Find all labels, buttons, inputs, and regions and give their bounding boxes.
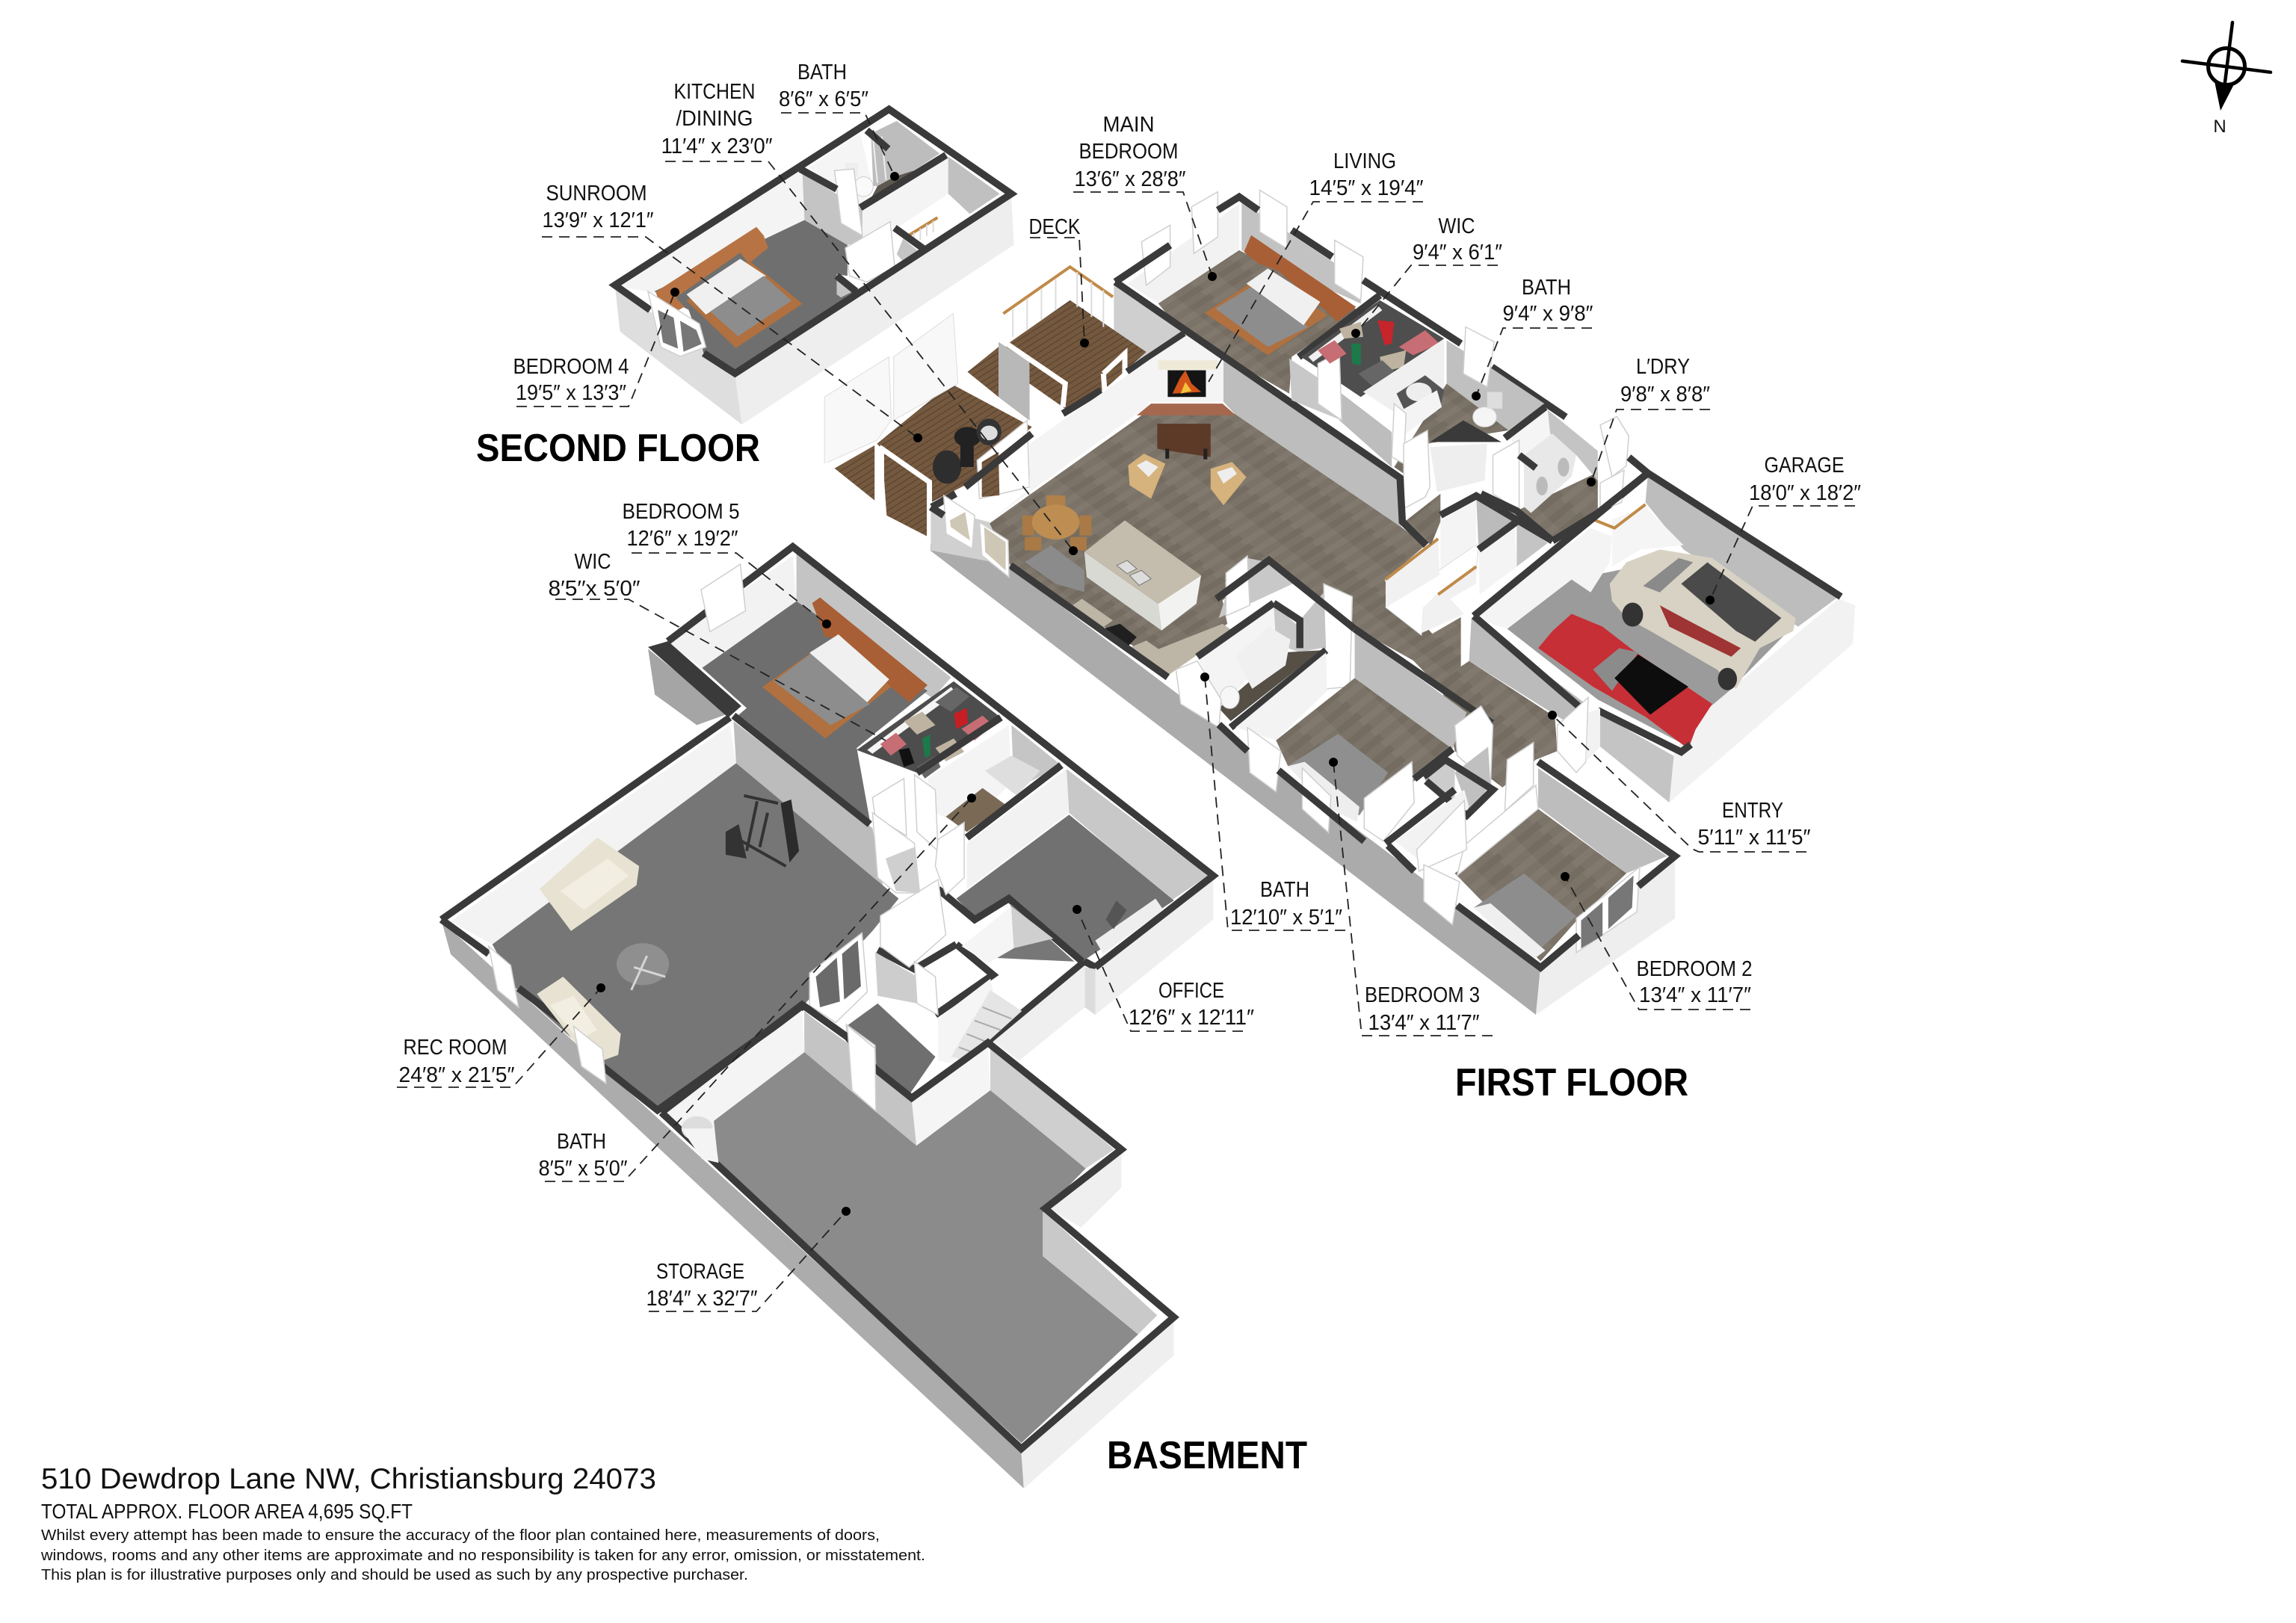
- label: second floor bath: BATH: [797, 61, 847, 84]
- label: sunroom: 13′9″ x 12′1″: [543, 208, 653, 232]
- text: disclaimer: windows, rooms and any other items are approximate and no responsibility is taken for any error, omission, or misstatement.: [40, 1547, 925, 1564]
- label: first floor hall bath: 12′10″ x 5′1″: [1230, 906, 1342, 930]
- label: first floor wic: [1351, 214, 1502, 338]
- carpet floor: [655, 220, 856, 374]
- label: main bedroom: BEDROOM: [1079, 140, 1178, 164]
- icon: armchair left: [1128, 454, 1165, 498]
- text: disclaimer: [40, 1527, 925, 1583]
- heading: first floor: FIRST FLOOR: [1455, 1061, 1688, 1104]
- icon: sofa: [540, 838, 639, 931]
- panel: hall closets: [1424, 706, 1534, 815]
- label: first floor main bath: [1472, 276, 1593, 401]
- door: entry: [1558, 697, 1588, 773]
- panel: bedroom 2: [1386, 761, 1675, 968]
- icon: bed basement: [762, 597, 928, 738]
- label: basement bath: [538, 794, 976, 1181]
- label: bedroom 5: 12′6″ x 19′2″: [626, 527, 738, 551]
- panel: main bedroom: [1115, 190, 1566, 480]
- icon: north compass: N: [2213, 117, 2226, 137]
- label: rec room: 24′8″ x 21′5″: [399, 1063, 514, 1087]
- label: second floor bath: [779, 61, 899, 181]
- exterior wall: basement long side: [442, 921, 1024, 1488]
- label: bedroom 5: BEDROOM 5: [622, 500, 740, 524]
- label: office: 12′6″ x 12′11″: [1129, 1006, 1254, 1030]
- label: bedroom 4: 19′5″ x 13′3″: [516, 381, 626, 405]
- stairwell upstairs: [836, 157, 1000, 297]
- label: bedroom 3: BEDROOM 3: [1365, 983, 1480, 1007]
- living room wood floor: [989, 409, 1461, 710]
- label: garage: GARAGE: [1764, 454, 1845, 477]
- label: rec room: REC ROOM: [404, 1036, 507, 1060]
- label: first floor wic: 9′4″ x 6′1″: [1413, 241, 1502, 265]
- icon: sunroom window: [648, 291, 706, 356]
- text: total floor area: TOTAL APPROX. FLOOR AREA 4,695 SQ.FT: [41, 1500, 413, 1523]
- label: laundry: [1587, 355, 1710, 486]
- label: bedroom 2: BEDROOM 2: [1637, 957, 1752, 981]
- panel: stairs: [1386, 477, 1552, 635]
- panel: hallway floor: [1440, 661, 1558, 788]
- panel: closet main bedroom: [1289, 300, 1444, 467]
- label: entry: ENTRY: [1722, 799, 1783, 823]
- icon: armchair: [537, 977, 621, 1064]
- icon: bed upstairs: [655, 227, 803, 348]
- label: rec room: [397, 983, 605, 1087]
- label: living: [1209, 149, 1423, 382]
- label: living: 14′5″ x 19′4″: [1309, 176, 1423, 200]
- label: storage: STORAGE: [656, 1260, 744, 1284]
- icon: window bedroom 5: [701, 564, 746, 631]
- label: laundry: L′DRY: [1636, 355, 1690, 379]
- panel: bedroom 3: [1219, 629, 1492, 841]
- panel: first floor north half: [824, 190, 1566, 710]
- label: bedroom 5: [622, 500, 831, 628]
- label: garage: 18′0″ x 18′2″: [1749, 481, 1861, 505]
- heading: second floor: SECOND FLOOR: [476, 427, 760, 470]
- label: bedroom 3: 13′4″ x 11′7″: [1368, 1011, 1480, 1035]
- label: bedroom 4: [513, 288, 679, 406]
- doors upstairs: [835, 169, 895, 282]
- panel: storage room: [661, 1004, 1174, 1488]
- label: second floor bath: 8′6″ x 6′5″: [779, 87, 868, 111]
- label: main bedroom: [1073, 113, 1217, 281]
- panel: second floor plan: [615, 109, 1014, 424]
- doors: french doors: [809, 933, 867, 1022]
- label: first floor hall bath: [1200, 673, 1345, 930]
- label: bedroom 3: [1329, 758, 1493, 1036]
- icon: rec room windows: [489, 946, 606, 1083]
- label: first floor hall bath: BATH: [1260, 878, 1309, 902]
- label: first floor main bath: BATH: [1522, 276, 1571, 300]
- panel: laundry room: [1481, 407, 1648, 541]
- label: bedroom 2: [1561, 872, 1752, 1010]
- icon: office desk and chair: [1095, 899, 1164, 954]
- label: kitchen dining: /DINING: [676, 107, 753, 131]
- label: living: LIVING: [1333, 149, 1396, 173]
- label: storage: 18′4″ x 32′7″: [646, 1287, 758, 1311]
- label: kitchen dining: [661, 80, 1078, 555]
- exterior wall: first floor long side: [931, 507, 1540, 1015]
- label: sunroom: SUNROOM: [546, 182, 647, 205]
- label: office: [1073, 905, 1254, 1031]
- panel: basement bath: [917, 717, 1061, 838]
- label: bedroom 2: 13′4″ x 11′7″: [1639, 983, 1751, 1007]
- panel: basement stair hall: [804, 952, 1022, 1098]
- label: kitchen dining: KITCHEN: [674, 80, 755, 104]
- label: sunroom: [542, 182, 922, 442]
- label: kitchen dining: 11′4″ x 23′0″: [661, 135, 773, 158]
- label: bedroom 4: BEDROOM 4: [513, 355, 629, 379]
- label: basement wic: [549, 550, 886, 741]
- panel: sunroom and deck: [824, 267, 1185, 540]
- panel: first floor plan: [824, 190, 1855, 1015]
- storage floor carpet: [714, 1052, 1138, 1443]
- icon: fireplace: [1137, 336, 1236, 415]
- label: storage: [646, 1207, 851, 1311]
- label: basement bath: BATH: [557, 1130, 606, 1154]
- panel: bath first floor: [1176, 556, 1355, 728]
- icon: dining table with chairs: [1022, 495, 1091, 551]
- icon: north compass: [2182, 22, 2271, 137]
- panel: garage: [1469, 473, 1855, 803]
- icon: armchair right: [1211, 462, 1247, 505]
- panel: basement walk-in closet: [857, 681, 1001, 779]
- label: basement wic: WIC: [574, 550, 611, 574]
- label: main bedroom: MAIN: [1103, 113, 1154, 137]
- icon: round glass table: [617, 943, 669, 990]
- panel: basement floor plan: [442, 547, 1213, 1488]
- panel: kitchen counters and island: [1010, 520, 1232, 677]
- label: first floor wic: WIC: [1438, 214, 1475, 238]
- text: disclaimer: This plan is for illustrative purposes only and should be used as such by any prospective purchaser.: [41, 1566, 748, 1583]
- panel: bath upstairs: [809, 121, 939, 208]
- label: office: OFFICE: [1158, 979, 1224, 1003]
- panel: first floor south half: [1176, 407, 1855, 1015]
- doors: basement interior: [872, 775, 964, 967]
- icon: coffee table: [1157, 424, 1211, 460]
- panel: bath main bedroom: [1363, 327, 1544, 509]
- door: storage: [848, 1025, 876, 1111]
- icon: garage door: [1669, 599, 1855, 803]
- label: entry: 5′11″ x 11′5″: [1698, 826, 1810, 850]
- icon: gym machine: [726, 796, 799, 866]
- label: entry: [1548, 711, 1810, 852]
- label: main bedroom: 13′6″ x 28′8″: [1075, 167, 1185, 191]
- icon: water heater: [682, 1116, 718, 1163]
- label: garage: [1706, 454, 1861, 605]
- label: first floor main bath: 9′4″ x 9′8″: [1502, 302, 1593, 326]
- icon: cream car: [1610, 549, 1795, 690]
- label: basement wic: 8′5′′x 5′0″: [549, 577, 640, 601]
- label: deck: DECK: [1028, 215, 1081, 239]
- text: disclaimer: Whilst every attempt has been made to ensure the accuracy of the floor plan contained here, measurements of doors,: [41, 1527, 880, 1544]
- title: address: 510 Dewdrop Lane NW, Christiansburg 24073: [41, 1463, 656, 1495]
- doors: kitchen patio: [931, 495, 1009, 577]
- label: basement bath: 8′5″ x 5′0″: [538, 1157, 628, 1181]
- panel: basement upper rooms: [442, 547, 1213, 1110]
- icon: red car: [1538, 613, 1712, 749]
- label: deck: [1028, 215, 1089, 347]
- heading: basement: BASEMENT: [1107, 1434, 1307, 1477]
- label: laundry: 9′8″ x 8′8″: [1620, 383, 1710, 406]
